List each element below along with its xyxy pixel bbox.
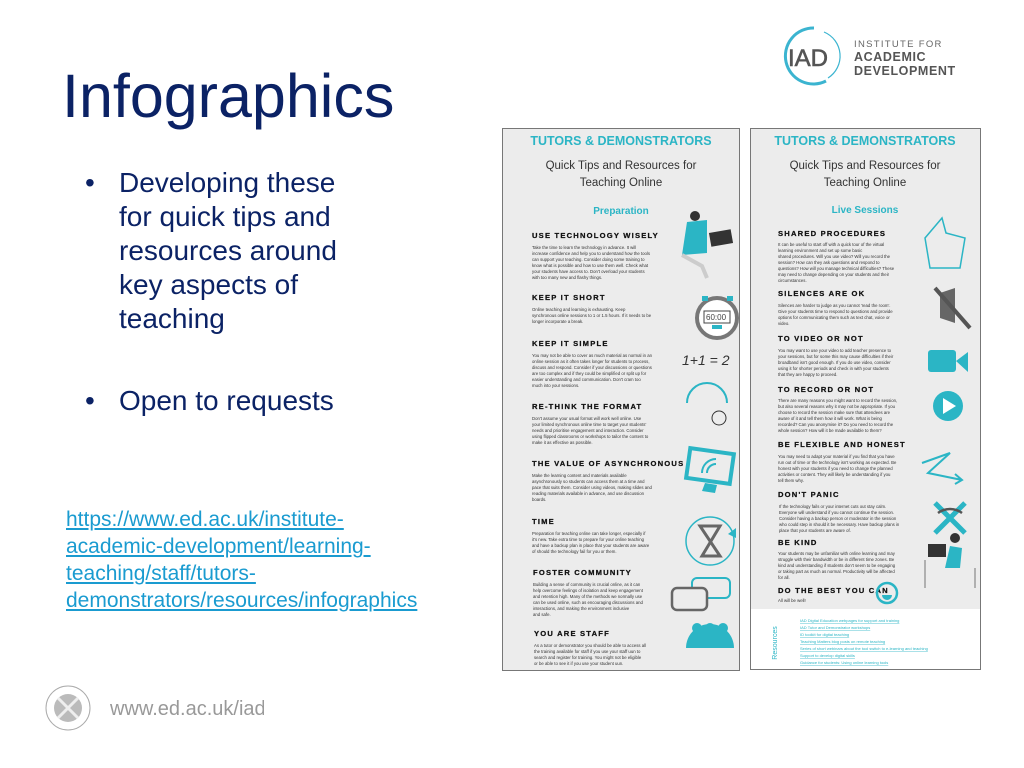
- panel: live sessions infographic: Live Sessions: [832, 205, 899, 216]
- bullet list: resources around: [119, 235, 337, 266]
- panel: live sessions infographic: struggle with their bandwidth or be in different time zones. Be: [778, 557, 895, 562]
- panel: preparation infographic: 1+1 = 2: [682, 352, 730, 368]
- panel: preparation infographic: can be used online, such as encouraging discussions and: [533, 600, 643, 605]
- panel: live sessions infographic: video.: [778, 321, 789, 326]
- panel: preparation infographic: Take the time to learn the technology in advance. It will: [532, 245, 636, 250]
- resources: ID toolkit for digital teaching: [800, 632, 849, 637]
- panel: live sessions infographic: aware of it and tell them how it will work. What is being: [778, 416, 882, 421]
- bullet list: •: [85, 167, 95, 198]
- panel: preparation infographic: reading materials available in advance, and use discussion: [532, 491, 645, 496]
- panel: preparation infographic: longer incorporate a break.: [532, 319, 583, 324]
- panel: preparation infographic: discuss and respond. Consider if your discussions or questions: [532, 365, 652, 370]
- panel: preparation infographic: help overcome feelings of isolation and keep engagement: [533, 588, 644, 593]
- link text: teaching/staff/tutors-: [66, 562, 256, 585]
- IAD logo: DEVELOPMENT: [854, 64, 956, 78]
- panel: live sessions infographic: circumstances.: [778, 278, 807, 283]
- panel: live sessions infographic: Consider having a backup person or moderator in the session: [779, 516, 897, 521]
- panel: live sessions infographic: DON'T PANIC: [778, 490, 840, 499]
- link text: demonstrators/resources/infographics: [66, 589, 417, 612]
- panel: preparation infographic: of should the technology fail for you or them.: [532, 549, 617, 554]
- panel: live sessions infographic: choose to record the session make sure that attendees are: [778, 410, 891, 415]
- panel: live sessions infographic: Quick Tips and Resources for: [790, 160, 941, 172]
- panel: live sessions infographic: that they are happy to proceed.: [778, 372, 837, 377]
- panel: preparation infographic: with too many new and flashy things.: [532, 275, 602, 280]
- panel: live sessions infographic: All will be well!: [778, 598, 806, 603]
- icons: [682, 211, 733, 278]
- panel: preparation infographic: [502, 128, 740, 671]
- panel: preparation infographic: FOSTER COMMUNITY: [533, 568, 632, 577]
- IAD logo: ACADEMIC: [854, 50, 926, 64]
- panel: preparation infographic: YOU ARE STAFF: [534, 629, 610, 638]
- panel: live sessions infographic: BE FLEXIBLE AND HONEST: [778, 440, 906, 449]
- panel: live sessions infographic: DO THE BEST YOU CAN: [778, 586, 889, 595]
- resources: IAD Digital Education webpages for support and training: [800, 618, 899, 623]
- IAD logo: [784, 26, 956, 86]
- panel: preparation infographic: needs and prioritise engagement and interaction. Consider: [532, 428, 644, 433]
- panel: preparation infographic: As a tutor or demonstrator you should be able to access all: [534, 643, 646, 648]
- panel: preparation infographic: know what is possible and how to use them well. Check what: [532, 263, 649, 268]
- IAD logo: INSTITUTE FOR: [854, 39, 943, 50]
- panel: live sessions infographic: whole session? How will it be made available to them?: [778, 428, 882, 433]
- bullet list: teaching: [119, 303, 225, 334]
- panel: preparation infographic: and retention high. Many of the methods we normally use: [533, 594, 643, 599]
- panel: preparation infographic: KEEP IT SIMPLE: [532, 339, 609, 348]
- resources: Support to develop digital skills: [800, 653, 855, 658]
- panel: preparation infographic: Preparation for teaching online can take longer, especially if: [532, 531, 646, 536]
- footer: university crest and url: [46, 686, 264, 730]
- bullet list: [85, 167, 337, 416]
- panel: live sessions infographic: There are many reasons you might want to record the session,: [778, 398, 897, 403]
- panel: live sessions infographic: using it for shorter periods and check in with your students: [778, 366, 889, 371]
- panel: preparation infographic: much into your sessions.: [532, 383, 579, 388]
- panel: preparation infographic: boards.: [532, 497, 546, 502]
- panel: live sessions infographic: Teaching Online: [824, 177, 906, 189]
- panel: preparation infographic: asynchronously so students can access them at a time and: [532, 479, 645, 484]
- panel: live sessions infographic: BE KIND: [778, 538, 818, 547]
- panel: live sessions infographic: TO RECORD OR NOT: [778, 385, 874, 394]
- panel: preparation infographic: search and register for training. You might not be eligible: [534, 655, 642, 660]
- panel: preparation infographic: it's new. Take extra time to prepare for your online teaching: [532, 537, 645, 542]
- panel: preparation infographic: THE VALUE OF ASYNCHRONOUS: [532, 459, 684, 468]
- panel: live sessions infographic: session? How can they ask questions and respond to: [778, 260, 880, 265]
- panel: live sessions infographic: Your students may be unfamiliar with online learning and may: [778, 551, 896, 556]
- panel: live sessions infographic: Give your students time to respond to questions and provide: [778, 309, 893, 314]
- panel: live sessions infographic: SILENCES ARE OK: [778, 289, 865, 298]
- panel: preparation infographic: Teaching Online: [580, 177, 662, 189]
- panel: live sessions infographic: You may want to use your video to add teacher presence to: [778, 348, 892, 353]
- panel: live sessions infographic: may need to change depending on your students and their: [778, 272, 890, 277]
- title: Infographics: [62, 62, 394, 130]
- panel: preparation infographic: RE-THINK THE FORMAT: [532, 402, 642, 411]
- panel: live sessions infographic: run out of time or the technology isn't working as expected. Be: [778, 460, 897, 465]
- panel: live sessions infographic: It can be useful to start off with a quick tour of the virtual: [778, 242, 884, 247]
- resources: Series of short webinars about the tool switch to e-learning and teaching: [800, 646, 928, 651]
- panel: preparation infographic: Online teaching and learning is exhausting. Keep: [532, 307, 626, 312]
- panel: live sessions infographic: who could step in should it be necessary. Have backup plans in: [779, 522, 900, 527]
- panel: preparation infographic: synchronous online sessions to 1 or 1.5 hours. If it needs to be: [532, 313, 652, 318]
- panel: live sessions infographic: Everyone will understand if you cannot continue the session.: [779, 510, 894, 515]
- resources: Teaching Matters blog posts on remote teaching: [800, 639, 885, 644]
- bullet list: for quick tips and: [119, 201, 331, 232]
- panel: preparation infographic: TIME: [532, 517, 555, 526]
- panel: preparation infographic: Building a sense of community is crucial online, as it can: [533, 582, 641, 587]
- panel: preparation infographic: TUTORS & DEMONSTRATORS: [530, 134, 712, 148]
- link text: academic-development/learning-: [66, 535, 371, 558]
- panel: live sessions infographic: your sessions, but for some this may cause difficulties if their: [778, 354, 894, 359]
- resources: Resources: [772, 626, 779, 660]
- panel: live sessions infographic: place that your students are aware of.: [779, 528, 851, 533]
- panel: live sessions infographic: If the technology fails or your internet cuts out stay calm.: [779, 504, 886, 509]
- panel: preparation infographic: or be able to see it if you use your student uun.: [534, 661, 623, 666]
- panel: preparation infographic: online session as it often takes longer for students to process,: [532, 359, 650, 364]
- panel: live sessions infographic: TUTORS & DEMONSTRATORS: [774, 134, 956, 148]
- panel: live sessions infographic: activities or content. They will likely be understanding if you: [778, 472, 891, 477]
- panel: live sessions infographic: learning environment and set up some basic: [778, 248, 863, 253]
- panel: preparation infographic: your limited synchronous online time to target your students': [532, 422, 646, 427]
- panel: live sessions infographic: Silences are harder to judge as you cannot 'read the room'.: [778, 303, 890, 308]
- panel: live sessions infographic: kind and understanding if students don't seem to be engaging: [778, 563, 896, 568]
- panel: live sessions infographic: SHARED PROCEDURES: [778, 229, 886, 238]
- IAD logo: IAD: [788, 45, 828, 72]
- panel: live sessions infographic: TO VIDEO OR NOT: [778, 334, 864, 343]
- panel: preparation infographic: interactions, and making the environment inclusive: [533, 606, 630, 611]
- resources: Guidance for students: Using online learning tools: [800, 660, 888, 665]
- panel: preparation infographic: Make the learning content and materials available: [532, 473, 627, 478]
- panel: live sessions infographic: recorded? Can you anonymise it? Do you need to record the: [778, 422, 894, 427]
- panel: preparation infographic: 60:00: [706, 313, 727, 322]
- panel: live sessions infographic: tell them why.: [778, 478, 804, 483]
- panel: preparation infographic: and have a backup plan in place that your students are aware: [532, 543, 650, 548]
- icons: [925, 218, 965, 268]
- panel: preparation infographic: USE TECHNOLOGY WISELY: [532, 231, 659, 240]
- panel: live sessions infographic: or taking part as much as normal. Productivity will be affected: [778, 569, 895, 574]
- panel: live sessions infographic: options for communicating them such as text chat, voice or: [778, 315, 890, 320]
- panel: preparation infographic: are too complex and if they could be simplified or split up for: [532, 371, 647, 376]
- panel: preparation infographic: your students have access to. Don't overload your students: [532, 269, 645, 274]
- bullet list: •: [85, 385, 95, 416]
- panel: live sessions infographic: broadband isn't good enough. If you do use video, consider: [778, 360, 891, 365]
- panel: preparation infographic: pace that suits them. Consider using videos, making slides and: [532, 485, 653, 490]
- panel: preparation infographic: Don't assume your usual format will work well online. Use: [532, 416, 642, 421]
- resources: [772, 618, 928, 665]
- panel: preparation infographic: can support your teaching. Consider doing some training to: [532, 257, 645, 262]
- panel: live sessions infographic: You may need to adapt your material if you find that you have: [778, 454, 895, 459]
- panel: preparation infographic: You may not be able to cover as much material as normal in an: [532, 353, 653, 358]
- link text: [66, 508, 418, 612]
- panel: preparation infographic: Preparation: [593, 206, 649, 217]
- panel: preparation infographic: increase confidence and help you to understand how the tools: [532, 251, 650, 256]
- panel: preparation infographic: KEEP IT SHORT: [532, 293, 606, 302]
- panel: live sessions infographic: but also several reasons why it may not be appropriate. If you: [778, 404, 896, 409]
- resources: IAD Tutor and Demonstrator workshops: [800, 625, 870, 630]
- panel: live sessions infographic: honest with your students if you need to change the planned: [778, 466, 893, 471]
- bullet list: key aspects of: [119, 269, 298, 300]
- bullet list: Developing these: [119, 167, 335, 198]
- panel: live sessions infographic: for all.: [778, 575, 790, 580]
- panel: live sessions infographic: [750, 128, 981, 670]
- panel: preparation infographic: make it as effective as possible.: [532, 440, 593, 445]
- link text: https://www.ed.ac.uk/institute-: [66, 508, 344, 531]
- panel: live sessions infographic: questions? How will you manage technical difficulties? These: [778, 266, 895, 271]
- panel: preparation infographic: using flipped classrooms or workshops to tailor the content to: [532, 434, 649, 439]
- bullet list: Open to requests: [119, 385, 334, 416]
- footer: university crest and url: www.ed.ac.uk/iad: [109, 698, 264, 720]
- panel: preparation infographic: and safe.: [533, 612, 551, 617]
- panel: live sessions infographic: shared procedures. Will you use video? Will you record the: [778, 254, 891, 259]
- panel: preparation infographic: the training available for staff if you use your staff uun to: [534, 649, 641, 654]
- panel: preparation infographic: Quick Tips and Resources for: [546, 160, 697, 172]
- panel: preparation infographic: easier understanding and communication. Don't cram too: [532, 377, 641, 382]
